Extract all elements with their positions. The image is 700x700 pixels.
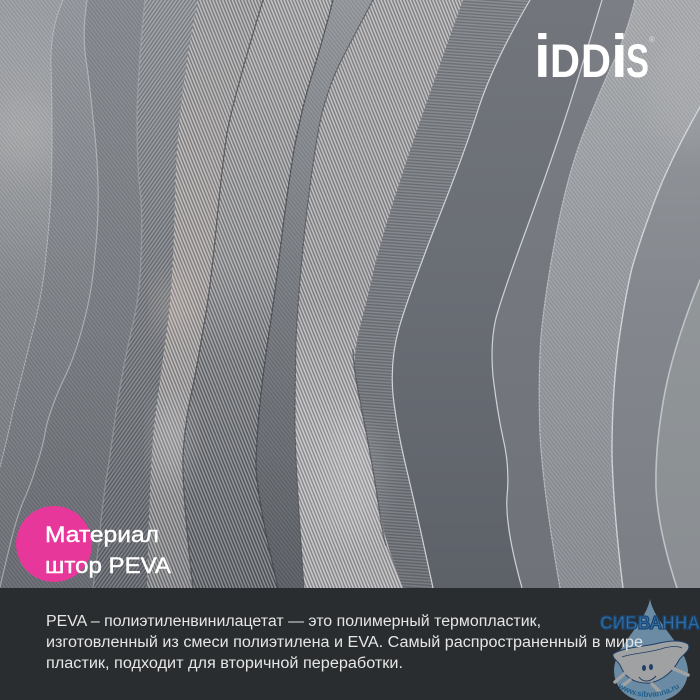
watermark drop — [614, 599, 688, 700]
description text: PEVA – полиэтиленвинилацетат — это полимерный термопластик, — [46, 613, 541, 630]
watermark name: СИБВАННА — [600, 613, 700, 633]
logo: IDDIS: i — [611, 23, 628, 90]
logo: IDDIS: i — [534, 23, 551, 90]
logo: IDDIS: D — [550, 34, 580, 87]
badge: pink circle — [16, 506, 92, 582]
watermark: SibVanna logo — [600, 599, 700, 700]
text panel background — [0, 588, 700, 700]
heading: material: штор PEVA — [45, 553, 171, 578]
logo: IDDIS: ® — [649, 35, 655, 44]
description text: пластик, подходит для вторичной переработки. — [46, 655, 403, 672]
logo: IDDIS — [534, 23, 655, 90]
logo: IDDIS: S — [626, 34, 649, 87]
watermark url: www.sibvanna.ru — [618, 684, 680, 697]
logo: IDDIS: D — [581, 34, 611, 87]
watermark bathtub — [613, 641, 689, 692]
description text: изготовленный из смеси полиэтилена и EVA. Самый распространенный в мире — [46, 634, 643, 651]
heading: material: Материал — [45, 522, 159, 547]
